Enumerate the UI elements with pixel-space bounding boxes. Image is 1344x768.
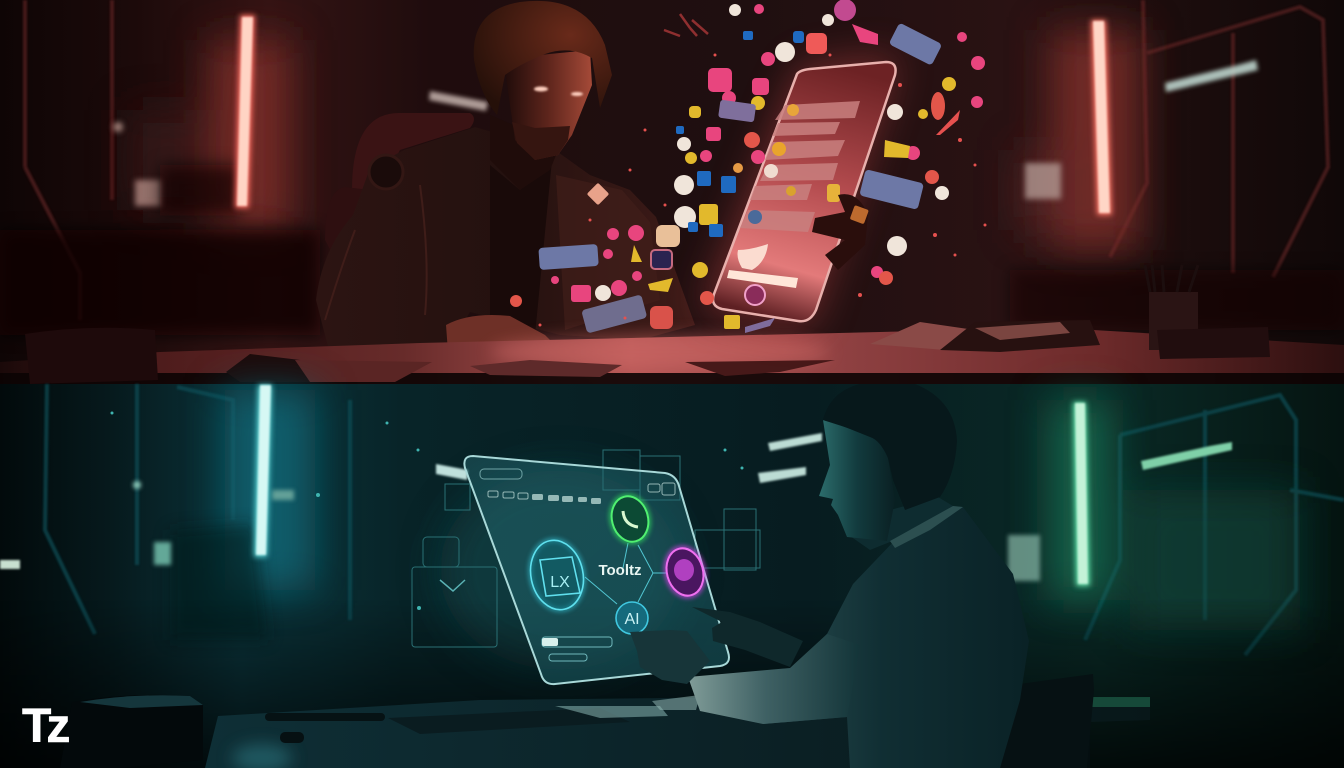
beard xyxy=(512,122,570,160)
top scene: overwhelmed man xyxy=(0,0,1344,384)
connector lines xyxy=(585,543,666,604)
face xyxy=(819,420,895,541)
neck xyxy=(850,497,953,550)
brain node xyxy=(661,544,709,600)
desk xyxy=(205,695,1150,768)
neck xyxy=(490,115,560,190)
dark box left xyxy=(25,328,158,384)
dark chair in back xyxy=(170,524,268,640)
blurred windows xyxy=(133,481,1040,581)
dark lower room xyxy=(0,600,1344,768)
face xyxy=(505,50,592,160)
sparks xyxy=(538,14,986,326)
ceiling strips xyxy=(0,433,1232,569)
pencil cup xyxy=(1145,265,1198,350)
desk papers xyxy=(226,320,1100,382)
hair xyxy=(474,1,612,115)
hand holding phone xyxy=(812,194,868,270)
floating sub-panels xyxy=(412,450,760,647)
ceiling light strips xyxy=(429,60,1258,111)
navy icon xyxy=(651,250,672,269)
calendar LX node xyxy=(524,535,590,615)
right neon bar xyxy=(1091,20,1112,215)
holographic dashboard xyxy=(464,456,729,684)
chair xyxy=(985,674,1094,768)
jacket xyxy=(316,127,695,353)
office chair xyxy=(325,113,474,265)
hair xyxy=(823,384,957,510)
WhatsApp node xyxy=(607,492,653,546)
AI node xyxy=(616,602,648,634)
collar xyxy=(890,506,963,548)
hands xyxy=(446,315,560,360)
window glows xyxy=(130,30,1140,250)
brand logo: Tz xyxy=(22,700,69,753)
pale blurred windows xyxy=(113,122,1061,206)
right green neon bar xyxy=(1073,402,1090,586)
dark interior shelves xyxy=(0,165,1344,335)
mascot xyxy=(738,244,768,270)
woman at dashboard xyxy=(630,384,1029,768)
message cards xyxy=(538,23,942,334)
smartphone with feed xyxy=(700,55,900,330)
hands xyxy=(630,607,803,684)
feed rows xyxy=(740,101,860,232)
glowing eyes xyxy=(534,86,583,96)
shirt body xyxy=(763,506,1029,768)
top toolbar xyxy=(480,469,675,504)
man xyxy=(316,1,695,360)
room frames xyxy=(45,384,1344,655)
AI node: AI xyxy=(624,611,640,628)
Tooltz wordmark: Tooltz xyxy=(598,562,642,579)
row avatars xyxy=(748,104,840,224)
desk xyxy=(0,328,1344,384)
sleeve xyxy=(688,634,860,724)
bottom scene: calm organised user xyxy=(0,384,1344,768)
left neon bar xyxy=(235,15,255,208)
calendar LX node: LX xyxy=(550,574,570,591)
box right xyxy=(1157,327,1270,359)
room background frames xyxy=(25,0,1328,320)
left teal neon bar xyxy=(254,385,272,557)
teal room glows xyxy=(225,390,1300,670)
action button xyxy=(727,270,798,288)
dark box left xyxy=(60,695,203,768)
swirl icon xyxy=(745,285,765,305)
floating social icons xyxy=(510,0,986,334)
lower form widgets xyxy=(542,637,612,661)
glints xyxy=(110,412,744,610)
